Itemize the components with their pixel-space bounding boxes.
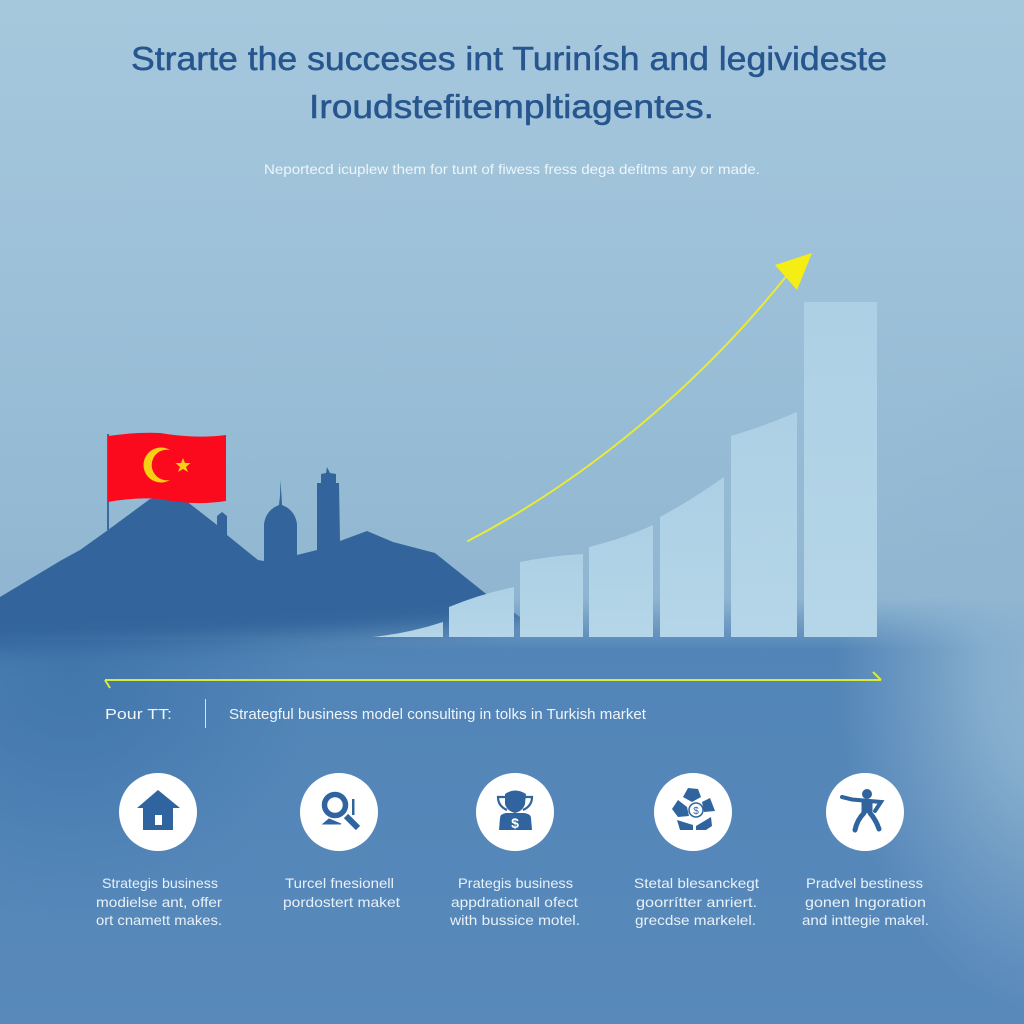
icon: trophy with dollar: $: [511, 815, 519, 831]
caption 5: gonen Ingoration: [805, 894, 926, 910]
subtitle: Neportecd icuplew them for tunt of fiwess fress dega defitms any or made.: [264, 161, 760, 177]
growth arrow: [468, 253, 812, 541]
icon: recycle arrows: $: [693, 806, 699, 817]
caption 5: and inttegie makel.: [802, 912, 929, 928]
timeline axis: [105, 672, 881, 688]
caption 1: [96, 875, 222, 928]
caption 4: grecdse markelel.: [635, 912, 756, 928]
skyline silhouette: [0, 467, 520, 654]
icon: recycle arrows: [654, 773, 732, 851]
label row: [105, 699, 647, 728]
caption 4: goorrítter anriert.: [636, 894, 757, 910]
icon: trophy with dollar: [476, 773, 554, 851]
caption 3: [449, 875, 580, 928]
caption 4: [634, 875, 759, 928]
caption 5: Pradvel bestiness: [806, 875, 923, 891]
label row: Strategful business model consulting in tolks in Turkish market: [229, 706, 647, 723]
icon: figure pointing: [826, 773, 904, 851]
caption 5: [802, 875, 929, 928]
icon: magnifier: [300, 773, 378, 851]
caption 4: Stetal blesanckegt: [634, 875, 759, 891]
caption 3: Prategis business: [458, 875, 573, 891]
title: [131, 40, 887, 125]
caption 2: Turcel fnesionell: [285, 875, 394, 891]
caption 3: appdrationall ofect: [451, 894, 578, 910]
title: Strarte the succeses int Turinísh and legivideste: [131, 40, 887, 77]
flag: red crescent and star: [107, 433, 226, 530]
icon: house: [119, 773, 197, 851]
label row: Pour TT:: [105, 706, 172, 723]
caption 2: pordostert maket: [283, 894, 400, 910]
caption 1: ort cnamett makes.: [96, 912, 222, 928]
caption 1: modielse ant, offer: [96, 894, 222, 910]
caption 3: with bussice motel.: [449, 912, 580, 928]
caption 1: Strategis business: [102, 875, 218, 891]
caption 2: [283, 875, 400, 910]
title: Iroudstefitempltiagentes.: [309, 88, 714, 125]
bar chart: [373, 302, 877, 637]
